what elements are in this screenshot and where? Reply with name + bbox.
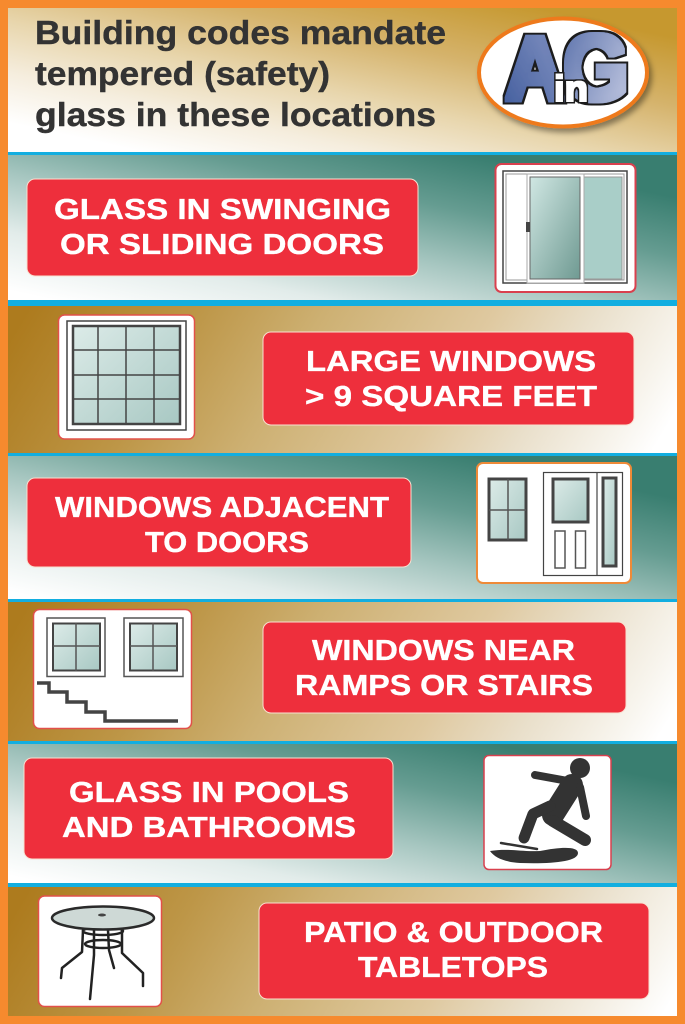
- label: glass in pools and bathrooms: AND BATHROOMS: [62, 812, 356, 844]
- icon: windows above stairs: [34, 610, 192, 728]
- label: patio and outdoor tabletops: TABLETOPS: [358, 952, 548, 984]
- label: windows adjacent to doors: WINDOWS ADJACENT: [55, 492, 389, 524]
- label: patio and outdoor tabletops: [259, 903, 649, 999]
- panel: header: [8, 8, 677, 152]
- label: windows adjacent to doors: TO DOORS: [145, 527, 309, 559]
- logo: AinG: [479, 15, 647, 126]
- label: large windows: > 9 SQUARE FEET: [305, 381, 597, 413]
- label: glass in pools and bathrooms: GLASS IN POOLS: [69, 777, 349, 809]
- panel: doors: [8, 155, 677, 301]
- label: windows adjacent to doors: [27, 478, 411, 567]
- title: glass in these locations: [35, 96, 436, 133]
- panel: windows near ramps or stairs: [8, 602, 677, 741]
- label: glass in swinging or sliding doors: OR SLIDING DOORS: [60, 229, 384, 261]
- label: glass in swinging or sliding doors: [27, 179, 418, 276]
- panel: large windows: [8, 306, 677, 453]
- panel: pools and bathrooms: [8, 744, 677, 883]
- logo: AinG: in: [554, 68, 588, 109]
- title: tempered (safety): [35, 55, 330, 92]
- icon: sliding door: [496, 164, 636, 292]
- logo: AinG: G: [563, 15, 629, 120]
- icon: person slipping: [484, 756, 611, 870]
- label: glass in swinging or sliding doors: GLASS IN SWINGING: [54, 194, 391, 226]
- icon: patio table: [38, 896, 162, 1006]
- panel: patio tabletops: [8, 887, 677, 1016]
- label: patio and outdoor tabletops: PATIO & OUTDOOR: [304, 917, 603, 949]
- icon: window beside door: [477, 463, 631, 583]
- title: Building codes mandate: [35, 14, 446, 51]
- icon: large window: [58, 315, 194, 439]
- logo: AinG: A: [505, 19, 565, 120]
- label: windows near ramps or stairs: [263, 622, 626, 713]
- label: windows near ramps or stairs: WINDOWS NEAR: [312, 635, 575, 667]
- label: windows near ramps or stairs: RAMPS OR STAIRS: [295, 670, 593, 702]
- label: large windows: [263, 332, 634, 425]
- title: [35, 14, 446, 133]
- label: large windows: LARGE WINDOWS: [306, 346, 596, 378]
- label: glass in pools and bathrooms: [24, 758, 393, 859]
- panel: windows adjacent to doors: [8, 456, 677, 599]
